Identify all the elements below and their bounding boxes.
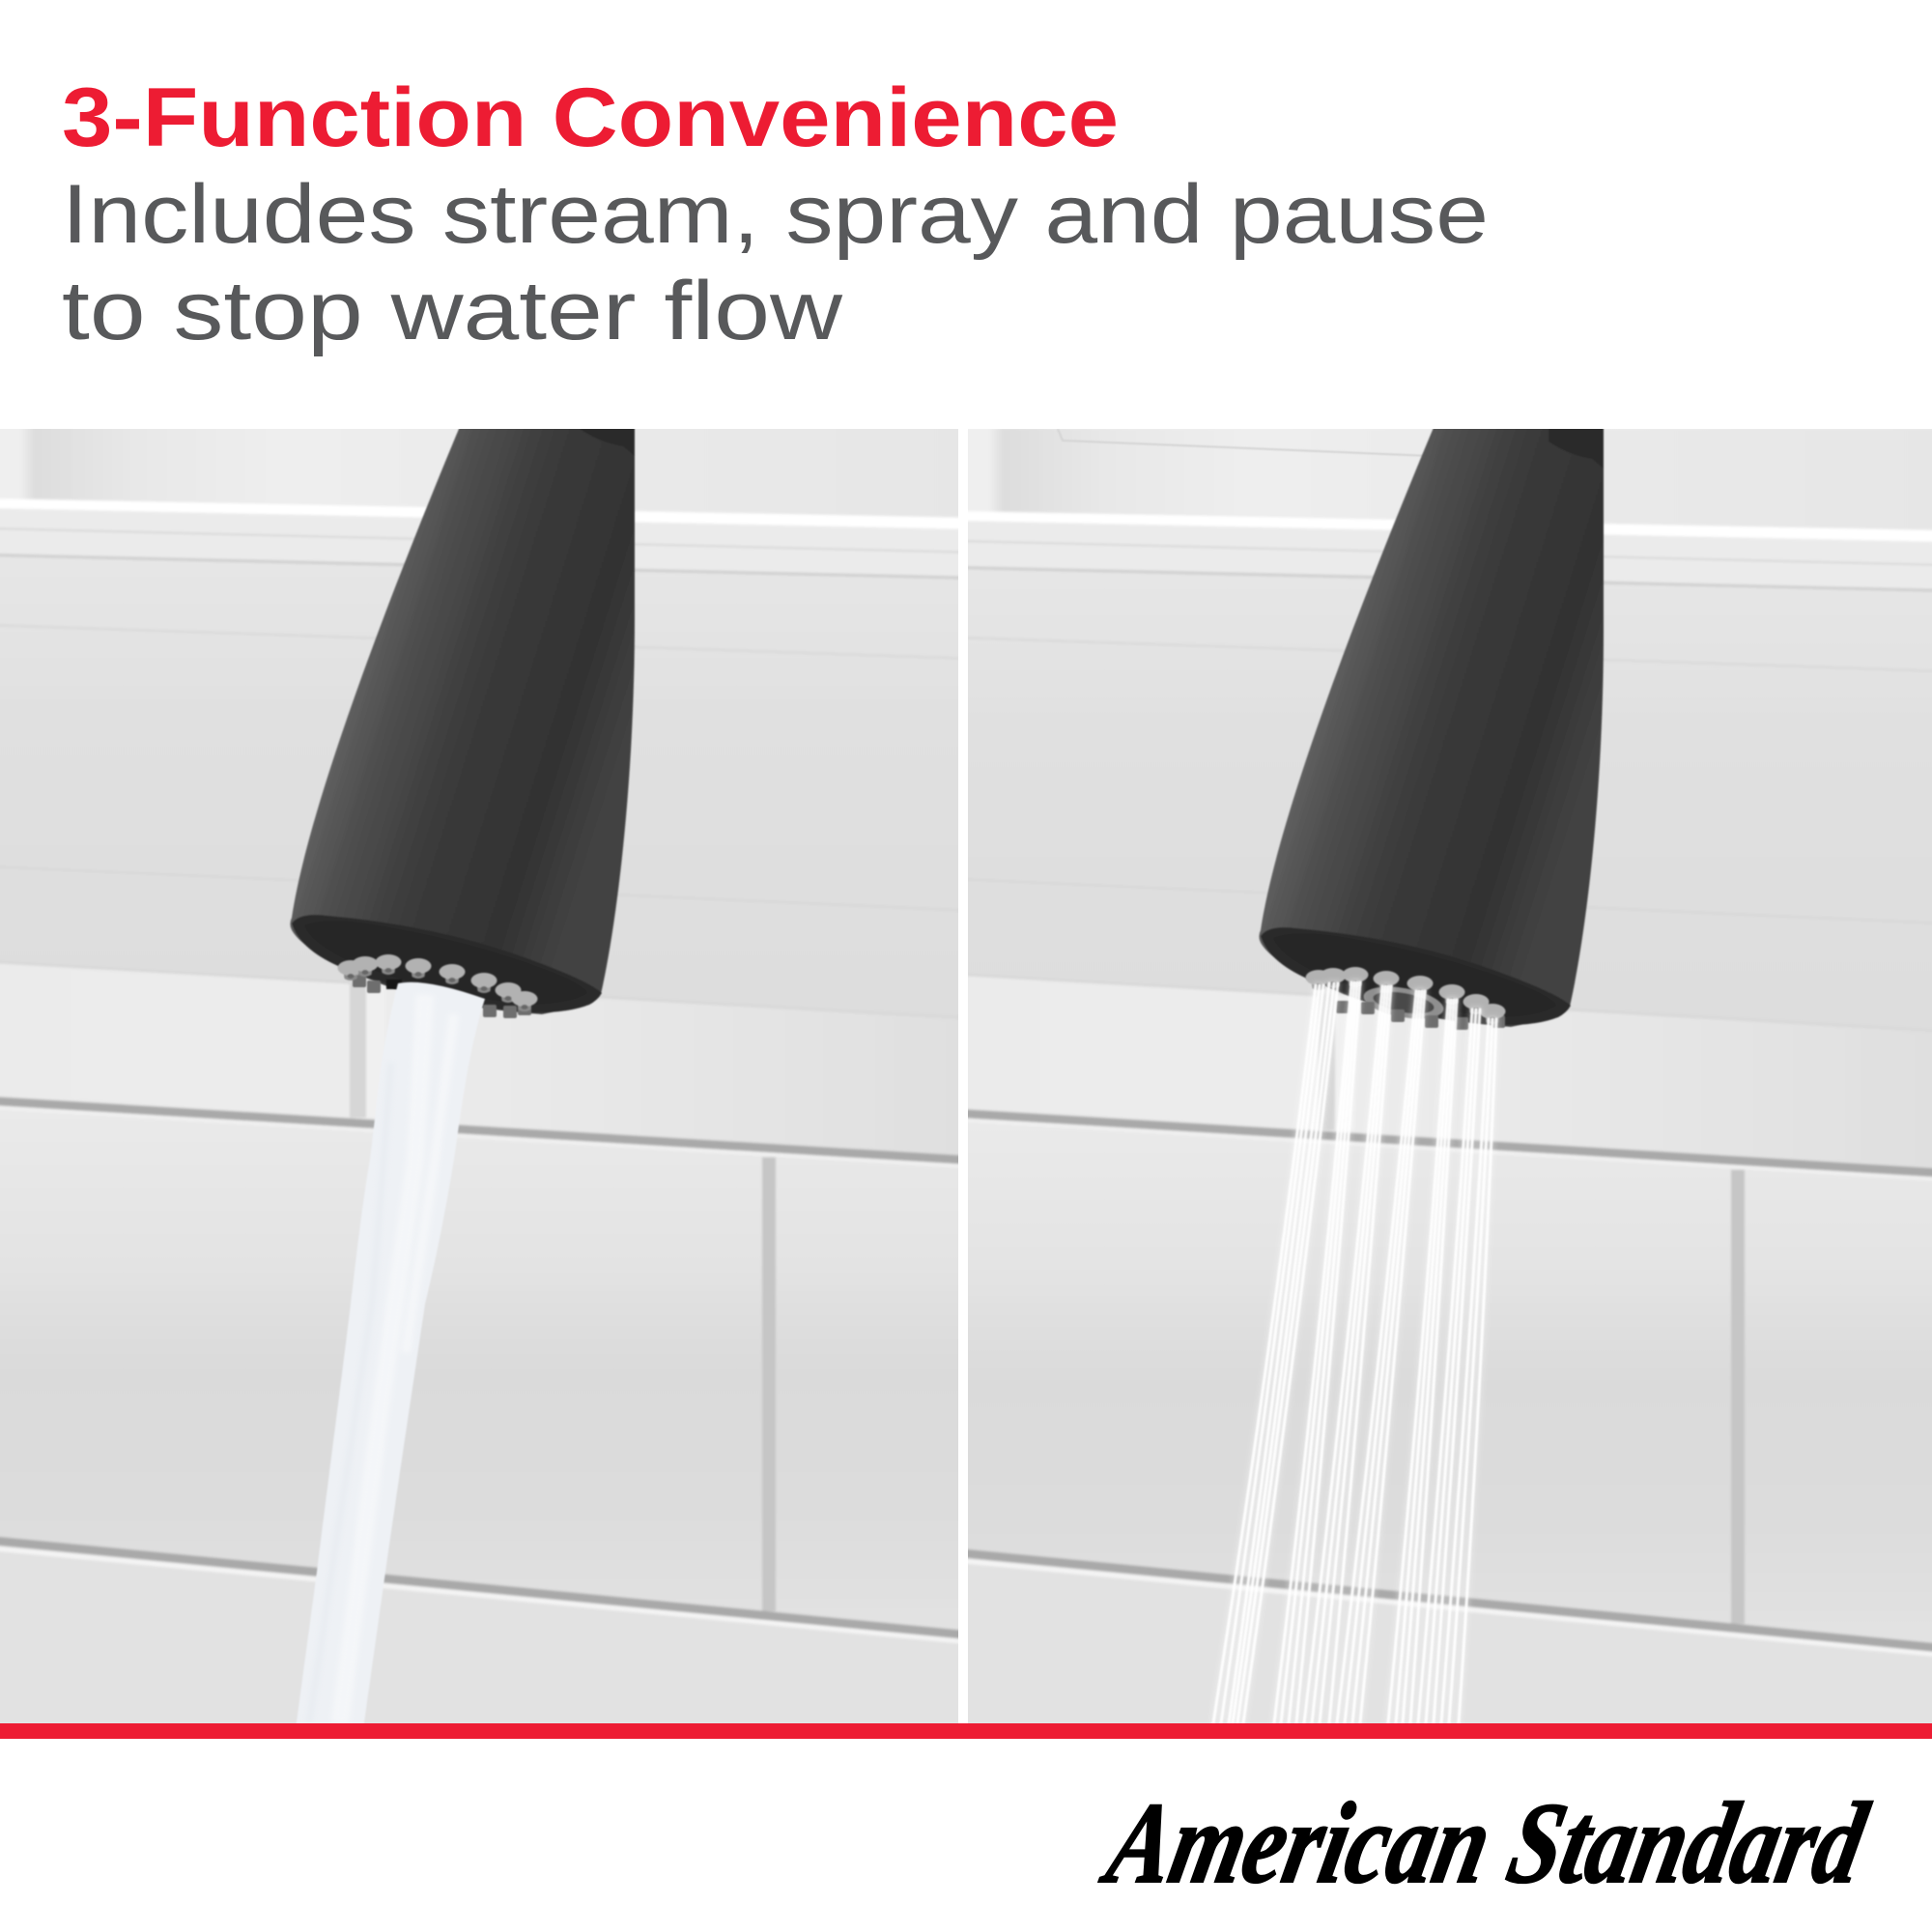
water stream xyxy=(296,982,485,1729)
faucet spray head xyxy=(290,406,635,1014)
niche outline xyxy=(1058,429,1430,456)
aerator and nozzles xyxy=(1306,967,1505,1030)
panel: spray mode xyxy=(959,418,1932,1751)
water spray strands xyxy=(1213,982,1496,1723)
description line 1: Includes stream, spray and pause xyxy=(62,168,1489,261)
tile wall background xyxy=(0,415,976,1739)
description line 2: to stop water flow xyxy=(62,265,843,357)
faucet spray head xyxy=(1259,418,1604,1027)
red divider bar xyxy=(0,1723,1932,1739)
title: 3-Function Convenience xyxy=(62,71,1119,164)
tile wall background xyxy=(959,428,1932,1751)
nozzles xyxy=(338,954,537,1018)
heading block xyxy=(62,71,1489,357)
panel: stream mode xyxy=(0,406,976,1739)
